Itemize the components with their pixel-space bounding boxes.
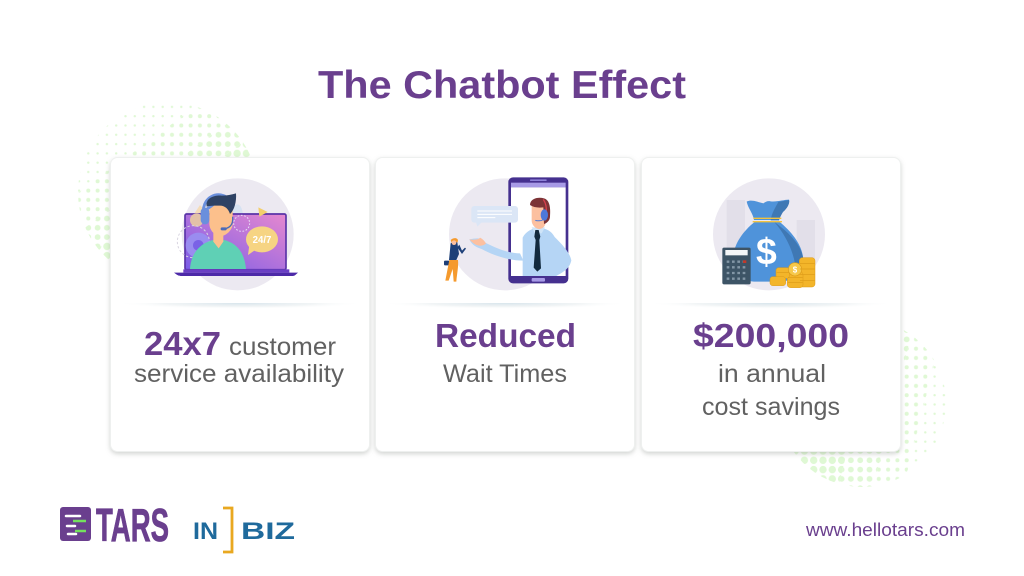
title: The Chatbot Effect <box>318 64 686 107</box>
panel: customer service availability <box>110 158 370 452</box>
card text: wait times: Wait Times <box>443 360 567 388</box>
logo: INBIZ: IN <box>193 518 218 545</box>
card text: cost savings: cost savings <box>702 393 840 421</box>
icon: support agent on laptop <box>174 178 298 290</box>
background halftone blob: bottom right <box>794 330 946 487</box>
card heading: reduced: Reduced <box>435 317 576 354</box>
website url: www.hellotars.com <box>805 520 965 540</box>
icon: money bag with calculator and coins <box>713 178 825 290</box>
icon: money bag with calculator and coins: $ <box>756 230 777 272</box>
icon: support agent on laptop: 24/7 <box>253 235 271 246</box>
card heading: $200,000: $200,000 <box>693 317 849 354</box>
background halftone blob: top left <box>78 106 250 259</box>
card text: service availability: service availability <box>134 360 345 388</box>
icon: money bag with calculator and coins: $ <box>793 265 798 274</box>
panel: annual cost savings <box>642 158 900 452</box>
logo: INBIZ <box>193 508 295 552</box>
logo: TARS: TARS <box>96 499 169 551</box>
logo: TARS <box>60 499 169 551</box>
card text: 24x7 customer: 24x7 <box>144 325 221 362</box>
card text: 24x7 customer: customer <box>229 333 336 361</box>
icon: agent on smartphone <box>444 177 571 290</box>
panel: reduced wait times <box>376 158 634 452</box>
logo: INBIZ: BIZ <box>241 518 295 545</box>
card text: in annual: in annual <box>718 360 826 388</box>
